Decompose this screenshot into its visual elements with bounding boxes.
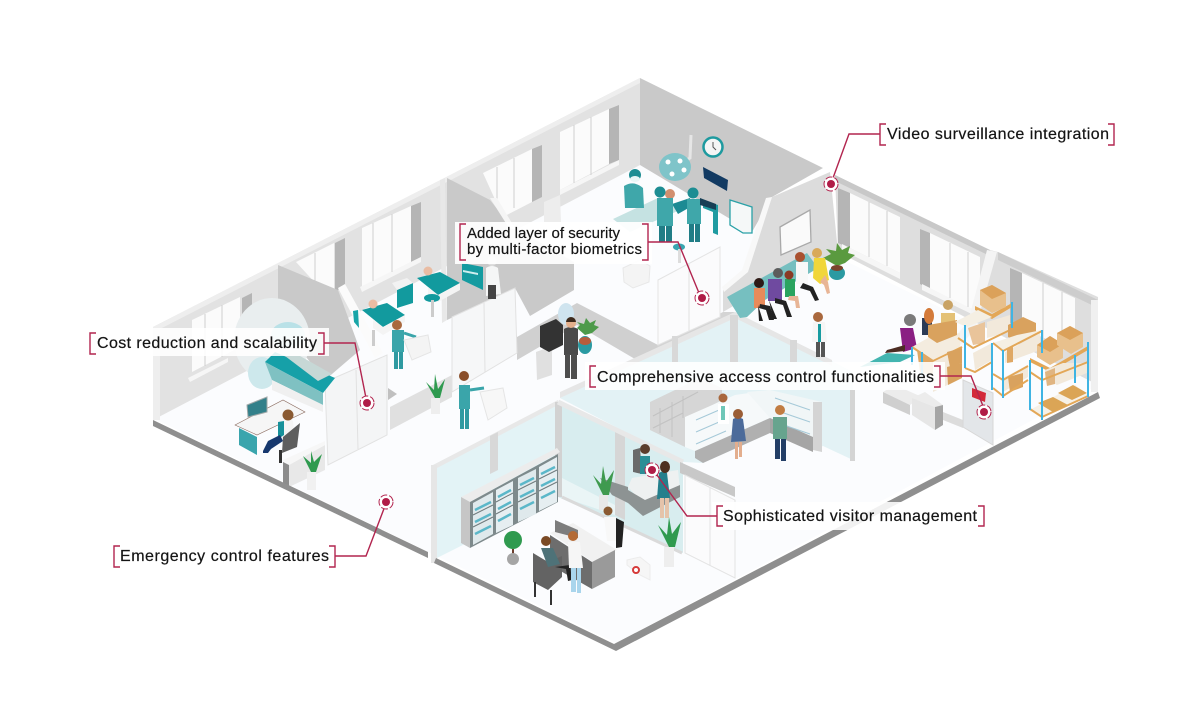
seated doctor (604, 506, 624, 548)
side door (963, 380, 993, 445)
bed one (353, 300, 405, 346)
marker (360, 396, 374, 410)
surgical lamp (659, 135, 691, 181)
partition walls (278, 172, 997, 430)
label: multi-factor biometrics: Added layer of security (467, 225, 620, 242)
marker (824, 177, 838, 191)
label: video surveillance integration (824, 124, 1114, 191)
front edges of building (153, 392, 1100, 651)
medical cart (700, 198, 718, 235)
stool (673, 244, 685, 263)
label: comprehensive access control: Comprehensive access control functionalities (597, 369, 934, 386)
pharmacist (718, 394, 729, 424)
doctor (486, 256, 501, 299)
surgery room (613, 135, 752, 288)
wall clock (704, 138, 722, 156)
access sign (972, 388, 986, 402)
label: cost reduction (85, 328, 374, 410)
first aid kit (627, 557, 650, 580)
surgeon three (687, 188, 701, 242)
standing doctor (812, 312, 827, 357)
wheelchair patient (885, 314, 917, 353)
label: cost reduction: Cost reduction and scalability (97, 335, 317, 352)
marker (379, 495, 393, 509)
wall monitor (703, 167, 728, 191)
label: video surveillance integration: Video surveillance integration (887, 126, 1109, 143)
visitor (657, 461, 670, 518)
reception desk (600, 470, 680, 516)
customer in green (773, 405, 787, 461)
blue posts (912, 302, 1088, 420)
coffee station (536, 303, 574, 380)
customer in dress (731, 409, 746, 459)
ward stool (424, 294, 440, 317)
corridor trolley (480, 388, 507, 420)
waiting room (727, 243, 955, 367)
seated green (784, 270, 800, 308)
glass cabinet (730, 200, 752, 233)
bed two (417, 266, 460, 302)
office desk (550, 520, 617, 589)
pharmacy glass walls (560, 312, 855, 463)
MRI room (234, 298, 335, 463)
low cabinets (883, 385, 963, 430)
operating table and patient (613, 189, 692, 232)
businessman (564, 317, 578, 379)
plant (823, 243, 855, 280)
floor plan (153, 160, 1098, 643)
seated patient (541, 536, 572, 581)
plant corridor (426, 374, 445, 414)
shelf unit three (993, 317, 1042, 396)
pharmacy counter (650, 378, 822, 463)
label: sophisticated visitor management (645, 463, 992, 530)
plant by door (658, 517, 681, 567)
trolley (623, 260, 650, 288)
label: emergency control: Emergency control features (120, 548, 329, 565)
marker (977, 405, 991, 419)
MRI scanner ring (234, 298, 310, 389)
operator (263, 410, 295, 453)
label: multi-factor biometrics: by multi-factor biometrics (467, 241, 642, 258)
teal lower seats (860, 353, 915, 367)
receptionist (633, 444, 650, 474)
seated purple (768, 268, 792, 319)
label: multi-factor biometrics (455, 222, 709, 305)
operator chair (279, 423, 300, 463)
trolley (404, 335, 431, 360)
chair (533, 553, 562, 605)
surgeon one (624, 169, 644, 208)
potted tree (504, 531, 522, 565)
back walls (153, 78, 1098, 420)
teal drawers (462, 263, 483, 290)
plant near MRI (303, 451, 322, 490)
shelf unit four (1030, 326, 1088, 417)
shelf unit one (912, 320, 962, 392)
seated blond (941, 300, 955, 331)
seated ginger (922, 308, 934, 335)
medicine shelves (461, 448, 560, 548)
door panels (283, 247, 720, 487)
marker (695, 291, 709, 305)
MRI bed with patient (265, 352, 335, 412)
plant by coffee (577, 318, 599, 354)
office room (461, 448, 650, 605)
ward room (353, 256, 501, 369)
seated orange (754, 278, 774, 321)
computer monitor (247, 397, 267, 417)
label: comprehensive access control (585, 362, 991, 419)
reception (593, 444, 681, 567)
marker (645, 463, 659, 477)
teal seats (727, 253, 818, 318)
standing assistant (568, 531, 583, 593)
label: sophisticated visitor management: Sophisticated visitor management (723, 508, 978, 525)
windows on right wall (838, 188, 1075, 352)
shelf unit two (955, 285, 1012, 372)
seated yellow (812, 248, 830, 294)
corridor nurse (459, 371, 484, 429)
surgeon two (654, 186, 673, 242)
windows on left wall (188, 105, 619, 382)
bedside cabinet (392, 278, 413, 308)
nurse (392, 320, 416, 369)
seated white coat (795, 252, 819, 301)
label: emergency control (114, 495, 393, 567)
office glass walls (431, 400, 735, 578)
plant reception (593, 466, 614, 510)
storage shelves (883, 285, 1088, 430)
operator desk (235, 400, 305, 455)
